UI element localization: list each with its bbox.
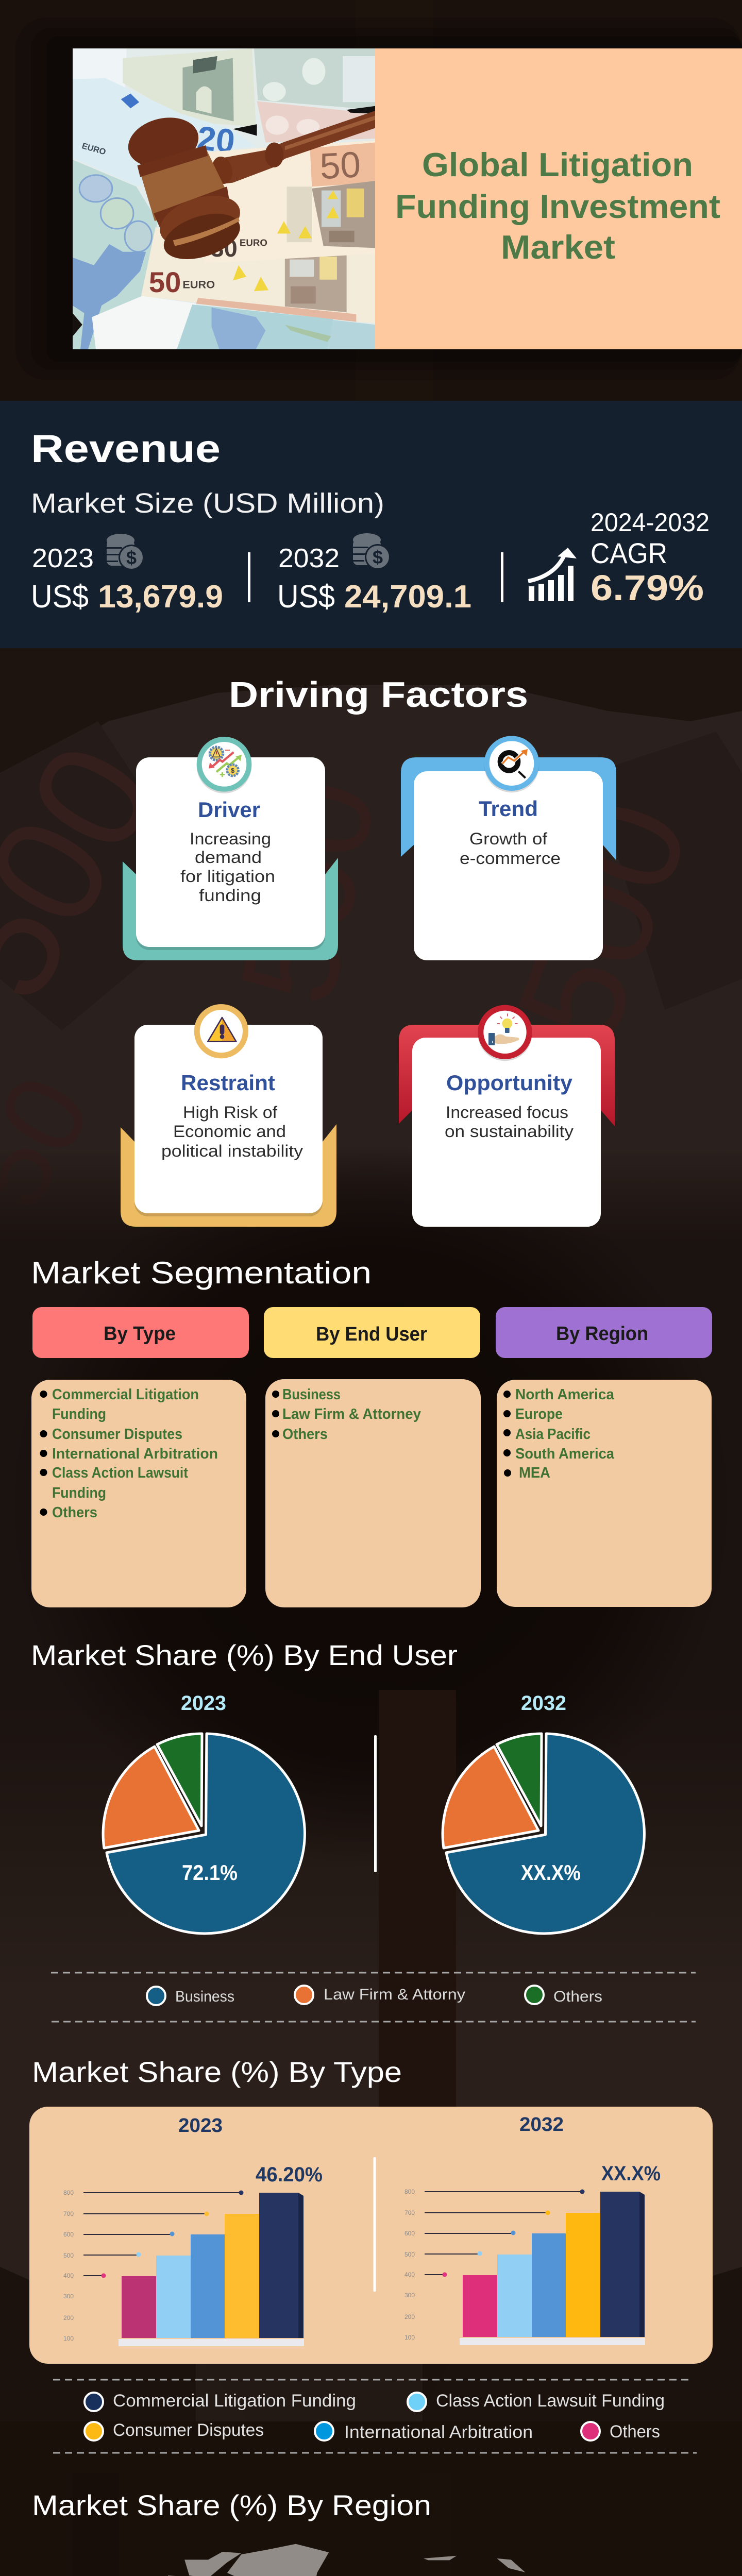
card: trend (401, 736, 616, 960)
icon: growth chart (528, 548, 577, 601)
stat: CAGR: 2024-2032 (591, 508, 710, 537)
photo: gavel on euro banknotes: EURO (81, 141, 107, 157)
label: trend: Trend (479, 796, 538, 821)
text: driver description: for litigation (180, 867, 275, 886)
legend: end user: Law Firm & Attorny (324, 1986, 465, 2003)
panel: type list (31, 1380, 246, 1607)
photo: gavel on euro banknotes: 30 (211, 235, 238, 262)
icon: trend (484, 736, 539, 792)
chart: pie 2023: 72.1% (182, 1860, 238, 1885)
text: trend description: e-commerce (460, 849, 561, 868)
stat: 2023 revenue: 2023 (32, 544, 94, 573)
chart: bars 2032: XX.X% (601, 2162, 661, 2185)
photo: gavel on euro banknotes: 50 (149, 266, 181, 298)
chart: bars 2023: 100 (63, 2335, 74, 2342)
panel: type list: Commercial Litigation (52, 1386, 199, 1403)
heading: market segmentation: Market Segmentation (31, 1256, 372, 1290)
panel: region list (497, 1380, 712, 1607)
panel: type list: Consumer Disputes (52, 1426, 182, 1443)
legend: type: International Arbitration (344, 2422, 533, 2442)
icon: coin stack 2023: $ (126, 547, 137, 568)
icon: coin stack 2032 (353, 533, 391, 570)
chart: pie 2023: 2023 (181, 1692, 226, 1715)
text: restraint description (161, 1103, 303, 1160)
heading: market share by type: Market Share (%) By Type (32, 2056, 402, 2088)
panel: type list: Others (52, 1504, 97, 1521)
stat: CAGR (591, 508, 710, 608)
heading: driving factors: Driving Factors (229, 674, 528, 715)
chart: bars 2023 (63, 2115, 323, 2346)
icon: coin stack 2023 (107, 534, 144, 570)
title: Market (501, 228, 615, 266)
chart: bars 2032: 100 (404, 2334, 415, 2341)
legend: type: Class Action Lawsuit Funding (436, 2391, 665, 2411)
stat: 2032 revenue: US$ (277, 579, 335, 615)
divider (373, 2157, 376, 2292)
panel: end user list (265, 1379, 481, 1607)
legend: type: Others (610, 2422, 660, 2442)
text: restraint description: High Risk of (183, 1103, 277, 1122)
stat: 2023 revenue: US$ (31, 579, 89, 615)
panel: end user list: Others (282, 1426, 328, 1443)
legend: type: Consumer Disputes (113, 2420, 264, 2440)
icon: restraint (194, 1004, 248, 1058)
divider (374, 1735, 377, 1872)
label: driver: Driver (198, 798, 260, 822)
chart: pie 2023 (103, 1692, 305, 1934)
text: opportunity description (445, 1103, 574, 1141)
card: driver (123, 737, 338, 960)
text: trend description: Growth of (469, 829, 547, 848)
background: dark wood and banknotes: 5 (414, 1027, 517, 1167)
text: driver description: demand (195, 848, 262, 867)
title: Global Litigation (422, 146, 693, 183)
chart: bars 2023: 46.20% (256, 2163, 323, 2186)
chart: bars 2032: 600 (404, 2230, 415, 2237)
photo: gavel on euro banknotes: EURO (182, 278, 215, 291)
segment header: by type (32, 1307, 249, 1358)
divider (501, 552, 503, 602)
panel: title background (375, 48, 742, 349)
chart: bars 2032: 300 (404, 2292, 415, 2299)
legend: end user: Business (175, 1988, 234, 2005)
segment header: by region: By Region (556, 1323, 648, 1345)
panel: region list: Europe (515, 1406, 563, 1422)
chart: bars 2023: 300 (63, 2293, 74, 2300)
legend: end user: Others (553, 1988, 602, 2005)
label: opportunity: Opportunity (446, 1071, 573, 1095)
segment header: by end user (264, 1307, 480, 1358)
panel: region list: North America (515, 1386, 615, 1403)
title (395, 146, 720, 266)
divider (248, 552, 250, 602)
photo: gavel on euro banknotes (73, 48, 375, 349)
text: opportunity description: on sustainability (445, 1122, 574, 1141)
photo: gavel on euro banknotes: 50 (319, 144, 362, 187)
legend: type (85, 2391, 665, 2442)
panel: end user list: Law Firm & Attorney (282, 1406, 421, 1422)
segment header: by type: By Type (104, 1323, 176, 1345)
chart: bars 2023: 500 (63, 2252, 74, 2259)
segment header: by region (496, 1307, 712, 1358)
gavel (123, 111, 375, 268)
stat: 2023 revenue (31, 544, 223, 615)
world map (71, 2544, 667, 2576)
panel: type list: Funding (52, 1406, 106, 1422)
heading: market share by region: Market Share (%) By Region (32, 2489, 431, 2521)
chart: bars 2032 (404, 2114, 661, 2345)
panel: bar charts (29, 2107, 713, 2364)
chart: bars 2023: 600 (63, 2231, 74, 2238)
chart: bars 2032: 500 (404, 2251, 415, 2258)
chart: bars 2032: 700 (404, 2209, 415, 2216)
card: opportunity (399, 1005, 615, 1227)
subheading: market size: Market Size (USD Million) (31, 488, 384, 519)
panel: type list: Funding (52, 1485, 106, 1501)
title: Funding Investment (395, 188, 720, 225)
text: driver description: funding (199, 886, 261, 905)
panel: region list: MEA (519, 1465, 550, 1481)
chart: bars 2023: 400 (63, 2272, 74, 2279)
background: dark wood and banknotes: 500 (212, 766, 404, 1016)
text: driver description: Increasing (190, 829, 271, 848)
chart: bars 2023: 200 (63, 2314, 74, 2321)
text: trend description (460, 829, 561, 868)
panel: region list: South America (515, 1446, 615, 1462)
legend: type: Commercial Litigation Funding (113, 2391, 356, 2411)
stat: 2032 revenue: 24,709.1 (344, 579, 471, 615)
heading: revenue: Revenue (31, 427, 221, 471)
icon: coin stack 2032: $ (373, 547, 383, 568)
chart: pie 2032 (443, 1692, 644, 1934)
chart: bars 2032: 800 (404, 2188, 415, 2195)
chart: bars 2023: 800 (63, 2189, 74, 2196)
heading: market share by end user: Market Share (%) By End User (31, 1639, 458, 1671)
panel: revenue band (0, 401, 742, 648)
text: restraint description: Economic and (173, 1122, 286, 1141)
background: dark wood and banknotes: 500 (486, 781, 719, 1062)
card: restraint (121, 1004, 336, 1227)
label: restraint: Restraint (181, 1071, 275, 1095)
text: restraint description: political instability (161, 1142, 303, 1160)
segment header: by end user: By End User (316, 1324, 427, 1345)
chart: pie 2032: 2032 (521, 1692, 566, 1715)
text: driver description (180, 829, 275, 905)
stat: 2032 revenue (277, 544, 471, 615)
stat: 2023 revenue: 13,679.9 (98, 579, 223, 615)
panel: type list: International Arbitration (52, 1446, 218, 1462)
panel: region list: Asia Pacific (515, 1426, 591, 1443)
chart: bars 2023: 700 (63, 2210, 74, 2217)
stat: 2032 revenue: 2032 (278, 544, 340, 573)
stat: CAGR: 6.79% (591, 568, 704, 608)
panel: type list: Class Action Lawsuit (52, 1465, 188, 1481)
icon: opportunity (478, 1005, 532, 1061)
icon: driver (197, 737, 251, 793)
chart: bars 2032: 200 (404, 2313, 415, 2320)
icon: driver: $ (231, 767, 234, 774)
header panel: title banner (73, 48, 742, 349)
chart: pie 2032: XX.X% (521, 1860, 581, 1885)
chart: bars 2032: 2032 (519, 2114, 564, 2136)
legend: end user (147, 1986, 602, 2005)
photo: gavel on euro banknotes: 20 (195, 119, 237, 160)
stat: CAGR: CAGR (591, 537, 667, 569)
chart: bars 2023: 2023 (178, 2115, 223, 2137)
chart: bars 2032: 400 (404, 2271, 415, 2278)
panel: end user list: Business (282, 1386, 341, 1403)
text: opportunity description: Increased focus (446, 1103, 568, 1122)
photo: gavel on euro banknotes: EURO (240, 238, 267, 248)
